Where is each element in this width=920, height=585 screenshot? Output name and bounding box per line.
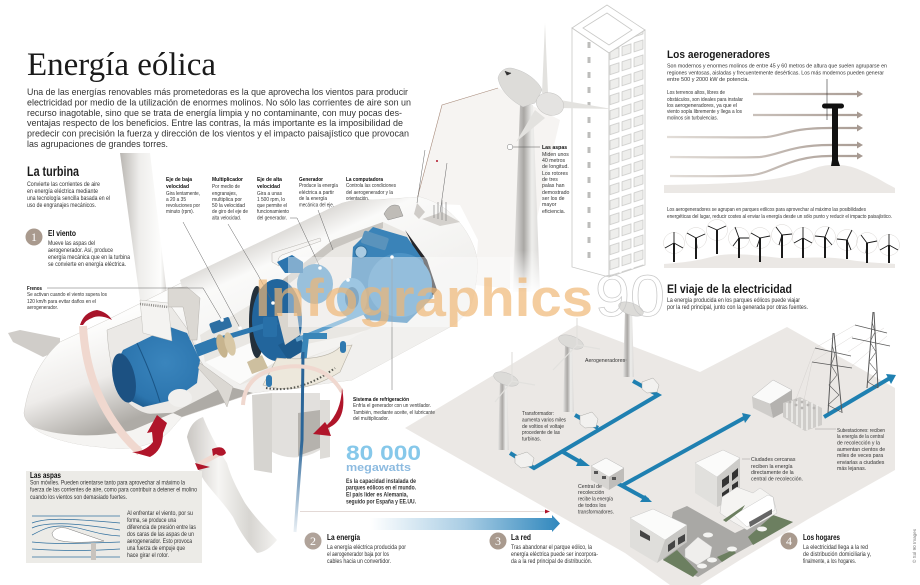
central label: transformadores. <box>578 510 614 516</box>
watermark: Infographics90: 90 <box>595 264 665 329</box>
turbine blades <box>516 23 612 142</box>
hub bracket <box>168 287 233 407</box>
anemometer and vent details <box>384 160 460 226</box>
label: eje de alta velocidad: velocidad <box>257 184 280 190</box>
roof slot <box>272 238 321 266</box>
intro paragraph: ventajas respecto de los beneficios. Entre las contras, la más importante es la imposibilidad de <box>27 118 403 128</box>
intro paragraph <box>27 87 411 149</box>
central label: de todos los <box>578 503 606 509</box>
wires <box>795 325 887 405</box>
copyright note: © Sol 90 Images <box>911 528 917 563</box>
step 1: el viento: se convierte en energía eléctrica. <box>48 261 126 268</box>
step 4: los hogares: finalmente, a los hogares. <box>803 558 856 565</box>
arrow heads <box>576 458 590 466</box>
nacelle opening <box>200 222 437 385</box>
panel: las aspas: cuando los vientos son demasiado fuertes. <box>30 494 127 501</box>
spinner lip <box>33 413 182 449</box>
turbine description: uso de engranajes mecánicos. <box>27 202 96 209</box>
aerogeneradores description <box>667 64 887 83</box>
label: sistema de refrigeración: También, mediante aceite, el lubricante <box>353 410 435 416</box>
label: sistema de refrigeración: Enfría el generador con un ventilador. <box>353 403 431 409</box>
arrow: big blue energy <box>370 515 560 532</box>
label: eje de alta velocidad: que permite el <box>257 203 287 209</box>
label: sistema de refrigeración: del multiplicador. <box>353 416 389 422</box>
wind profile note: Los terrenos altos, libres de <box>667 90 725 96</box>
label: generador <box>299 177 338 208</box>
label: freno: aerogenerador. <box>27 305 58 311</box>
label: la computadora: del aerogenerador y la <box>346 190 393 196</box>
farm labels <box>522 358 627 442</box>
panel: las aspas: aerogenerador. Esto provoca <box>127 538 193 545</box>
label: las aspas (scale): Las aspas <box>542 145 567 151</box>
label: freno: 120 km/h para evitar daños en el <box>27 299 96 305</box>
step 4: los hogares: de distribución domiciliaria y, <box>803 551 871 558</box>
substation label: de recolección y la <box>837 440 880 446</box>
step 3: la red: da a la red principal de distribución. <box>511 558 592 565</box>
step 1: el viento <box>26 228 131 268</box>
label: la computadora <box>346 177 396 202</box>
blue cable <box>295 352 303 532</box>
pylon 2 <box>852 312 890 388</box>
step 3: la red: Tras abandonar el parque eólico, la <box>511 544 593 551</box>
label: multiplicador: Multiplicador <box>212 177 243 183</box>
step 2: la energía: La energía eléctrica producida por <box>327 544 406 551</box>
substation label: Subestaciones: reciben <box>837 428 885 434</box>
intro paragraph: electricidad por medio de la utilización de enormes molinos. No sólo las corrientes de aire son un <box>27 98 411 108</box>
central de recolección <box>591 458 624 490</box>
pylon 1 <box>812 333 852 413</box>
step 4: los hogares: 4 <box>786 534 792 548</box>
wind profile note: obstáculos, son ideales para instalar <box>667 97 743 103</box>
label: eje de baja velocidad: a 20 a 35 <box>166 197 186 203</box>
panel: las aspas <box>26 471 202 563</box>
small house <box>685 537 712 565</box>
substation and capacitor array <box>752 380 822 431</box>
panel: las aspas: Son móviles. Pueden orientarse tanto para aprovechar al máximo la <box>30 480 186 486</box>
label: las aspas (scale): Los rotores <box>542 171 568 177</box>
yaw arrow <box>313 388 343 436</box>
farm labels: de voltios el voltaje <box>522 424 564 430</box>
label: las aspas (scale): de longitud. <box>542 164 569 170</box>
city label: directamente de la <box>751 470 794 476</box>
turbine hub <box>533 89 567 119</box>
multiplier (blue gearbox) <box>249 255 305 361</box>
label: generador: mecánica del eje. <box>299 202 334 208</box>
label: eje de alta velocidad: Eje de alta <box>257 177 282 183</box>
label: eje de baja velocidad: revoluciones por <box>166 203 200 209</box>
heading: los aerogeneradores: Los aerogeneradores <box>667 49 770 61</box>
wind park row of turbines <box>664 220 900 268</box>
wind profile note: molinos sin turbulencias. <box>667 116 718 122</box>
hill <box>664 165 895 193</box>
viaje description <box>667 297 808 311</box>
label: eje de alta velocidad: del generador. <box>257 216 287 222</box>
wind parks note <box>667 207 892 220</box>
label: la computadora: Controla las condiciones <box>346 183 396 189</box>
lower left building <box>630 509 687 563</box>
label: las aspas (scale): palas han <box>542 183 565 189</box>
stat: 80 000 megawatts: El país líder es Alemania, <box>346 492 408 498</box>
intro paragraph: predecir con precisión la fuerza y dirección de los vientos y el impacto paisajístico que provocan <box>27 128 409 138</box>
stat: 80 000 megawatts: parques eólicos en el mundo. <box>346 484 416 492</box>
label: freno <box>27 286 107 311</box>
intro paragraph: las agrupaciones de grandes torres. <box>27 139 168 149</box>
lower blade <box>187 417 277 553</box>
label: eje de alta velocidad: 1 500 rpm, lo <box>257 197 285 203</box>
city label: Ciudades cercanas <box>751 457 796 463</box>
city base <box>663 506 793 577</box>
projection: pale zoom area behind nacelle <box>416 88 560 290</box>
city label <box>742 457 803 482</box>
turbine description <box>27 181 110 209</box>
label: las aspas (scale): ser los de <box>542 196 565 202</box>
farm labels: turbinas. <box>522 436 541 442</box>
label: las aspas (scale): Miden unos <box>542 152 569 158</box>
panel: las aspas: hace girar el rotor. <box>127 552 169 559</box>
step 1: el viento: energía mecánica que en la turbina <box>48 254 131 261</box>
leader lines <box>47 150 447 390</box>
panel: las aspas: forma, se produce una <box>127 517 176 524</box>
label: multiplicador: 50 la velocidad <box>212 203 245 209</box>
label: eje de baja velocidad: minuto (rpm). <box>166 209 194 215</box>
low speed shaft <box>196 317 277 359</box>
watermark: Infographics90: Infographics <box>255 269 593 328</box>
label: multiplicador: engranajes, <box>212 191 237 197</box>
label: la computadora: orientación. <box>346 196 369 202</box>
dark crescent <box>405 230 437 308</box>
label: freno: Se activan cuando el viento supera los <box>27 292 107 298</box>
label: las aspas (scale): mayor <box>542 202 557 208</box>
intro paragraph: recurso inagotable, sino que se trata de energía limpia y no contaminante, con muy pocas des- <box>27 108 402 118</box>
farm labels: aumenta varios miles <box>522 418 566 424</box>
step 2: la energía: 2 <box>310 534 316 548</box>
label: las aspas (scale): demostrado <box>542 190 570 196</box>
label: las aspas (scale) <box>507 144 570 215</box>
step 3: la red <box>490 532 598 565</box>
intro paragraph: Una de las energías renovables más prometedoras es la que aprovecha los vientos para producir <box>27 87 408 97</box>
label: multiplicador: alta velocidad. <box>212 216 241 222</box>
panel: las aspas: Al enfrentar el viento, por su <box>127 510 193 517</box>
central label <box>578 484 614 516</box>
step 4: los hogares: Los hogares <box>803 533 840 542</box>
substation label: la energía de la central <box>837 434 884 440</box>
tall building <box>695 450 740 507</box>
farm turbine 2 <box>553 318 600 412</box>
step 1: el viento: 1 <box>31 230 37 244</box>
airfoil diagram <box>32 516 120 560</box>
panel: las aspas: dos caras de las aspas de un <box>127 531 194 538</box>
city block <box>630 450 793 577</box>
stat: 80 000 megawatts: megawatts <box>346 462 411 474</box>
wind profile note: viento sopla libremente y llega a los <box>667 109 742 115</box>
step 2: la energía: cables hacia un convertidor. <box>327 558 391 565</box>
aerogeneradores description: Son modernos y enormes molinos de entre 45 y 60 metros de altura que suelen agruparse en <box>667 64 887 70</box>
step 1: el viento: aerogenerador. Así, produce <box>48 247 114 254</box>
transformers <box>515 378 659 468</box>
generator (blue) <box>297 227 433 323</box>
label: eje de baja velocidad: Gira lentamente, <box>166 191 200 197</box>
background building outline <box>572 5 645 277</box>
wind profile diagram <box>664 79 895 193</box>
label: generador: Produce la energía <box>299 183 338 189</box>
substation label: más lejanas. <box>837 466 866 472</box>
label: sistema de refrigeración: Sistema de refrigeración <box>353 397 409 403</box>
label: eje de baja velocidad: velocidad <box>166 184 189 190</box>
label: las aspas (scale): 40 metros <box>542 158 565 164</box>
label: eje de baja velocidad <box>166 177 200 215</box>
green patches <box>663 550 698 577</box>
blade: top <box>120 153 168 303</box>
stat: 80 000 megawatts: Es la capacidad instalada de <box>346 478 417 485</box>
label: la computadora: La computadora <box>346 177 383 183</box>
label: generador: de la energía <box>299 196 327 202</box>
central label: recolección <box>578 490 604 496</box>
stat: 80 000 megawatts <box>346 442 421 506</box>
title: Energía eólica <box>27 47 216 83</box>
middle building <box>720 487 777 530</box>
step 3: la red: 3 <box>495 534 501 548</box>
stat: 80 000 megawatts: 80 000 <box>346 442 421 465</box>
step 4: los hogares: La electricidad llega a la red <box>803 544 868 551</box>
small turbine showing scale <box>498 23 612 294</box>
spinner opening <box>107 305 218 414</box>
label: las aspas (scale): eficiencia. <box>542 209 565 215</box>
label: eje de baja velocidad: Eje de baja <box>166 177 192 183</box>
label: eje de alta velocidad: funcionamiento <box>257 209 289 215</box>
pitch arrow <box>195 447 226 470</box>
turbine description: Convierte las corrientes de aire <box>27 181 101 188</box>
substation label <box>815 428 885 472</box>
step 3: la red: energía eléctrica puede ser incorpora- <box>511 551 598 558</box>
wind profile note: los aerogeneradores, ya que el <box>667 103 737 109</box>
substation label: enviarlas a ciudades <box>837 460 885 466</box>
blue power lines <box>510 374 896 502</box>
label: multiplicador: de giro del eje de <box>212 209 248 215</box>
central label: Central de <box>578 484 602 490</box>
rotor arrow <box>132 415 167 457</box>
turbine nacelle <box>498 68 542 107</box>
stat: 80 000 megawatts: seguido por España y EE.UU. <box>346 498 416 506</box>
step 2: la energía: el aerogenerador baja por los <box>327 551 389 558</box>
heading: la turbina: La turbina <box>27 163 79 179</box>
step 2: la energía: La energía <box>327 533 360 542</box>
turbine description: una tecnología sencilla basada en el <box>27 195 110 202</box>
label: eje de alta velocidad: Gira a unas <box>257 191 282 197</box>
label: generador: eléctrica a partir <box>299 190 334 196</box>
wind profile note <box>667 90 743 122</box>
ground plane: isometric wind farm <box>405 325 895 585</box>
label: las aspas (scale): de tres <box>542 177 558 183</box>
main hub (blue) <box>108 327 200 407</box>
city label: central de recolección. <box>751 476 803 482</box>
city label: reciben la energía <box>751 464 793 470</box>
panel: las aspas: Las aspas <box>30 471 61 480</box>
farm turbine 1 <box>492 352 535 450</box>
high speed shaft and pipe <box>296 310 370 365</box>
wind parks note: Los aerogeneradores se agrupan en parques eólicos para aprovechar al máximo las posibilidades <box>667 207 866 213</box>
label: sistema de refrigeración <box>353 397 435 422</box>
nacelle and spinner shell <box>24 197 478 449</box>
farm labels: procedente de las <box>522 430 560 436</box>
electricity pylons <box>795 312 890 413</box>
aerogeneradores description: regiones ventosas, aisladas y frecuentemente desérticas. Los más modernos pueden generar <box>667 70 884 76</box>
step 1: el viento: Mueve las aspas del <box>48 240 95 247</box>
label: multiplicador: multiplica por <box>212 197 242 203</box>
red rotation arrows <box>80 310 343 470</box>
panel: las aspas: fuerza de las corrientes de aire, como para contribuir a detener el molino <box>30 486 198 494</box>
panel: las aspas: diferencia de presión entre las <box>127 524 196 531</box>
step 1: el viento: El viento <box>48 229 76 238</box>
pale rotation bands <box>83 326 342 465</box>
substation label: miles de veces para <box>837 453 883 459</box>
turbine description: en energía eléctrica mediante <box>27 188 99 195</box>
farm turbine 3 <box>617 299 645 377</box>
panel: las aspas: una fuerza de empuje que <box>127 545 185 552</box>
farm labels: Transformador: <box>522 411 554 417</box>
left-face windows <box>588 42 590 258</box>
farm labels: Aerogeneradores <box>585 358 625 364</box>
arrow: thin red to the grid <box>300 510 550 514</box>
viaje description: por la red principal, junto con la generada por otras fuentes. <box>667 304 808 311</box>
heading: el viaje de la electricidad: El viaje de la electricidad <box>667 284 792 296</box>
floor beam <box>205 338 302 384</box>
viaje description: La energía producida en los parques eólicos puede viajar <box>667 297 800 304</box>
parked cars <box>697 526 767 568</box>
label: multiplicador <box>212 177 248 222</box>
wind arrows <box>667 94 858 176</box>
label: generador: Generador <box>299 177 323 183</box>
central label: recibe la energía <box>578 496 613 502</box>
outer shell <box>24 197 478 449</box>
yaw ring and tower section <box>252 341 352 473</box>
label: multiplicador: Por medio de <box>212 184 240 190</box>
blade root collar <box>140 300 172 341</box>
upper shell shading <box>253 222 383 308</box>
blade: left stub <box>8 330 60 357</box>
substation label: aumentan cientos de <box>837 447 885 453</box>
black turbine <box>822 79 844 166</box>
step 3: la red: La red <box>511 533 531 542</box>
wind parks note: energéticas del lugar, reducir costes al enviar la energía desde un sólo punto y reducir el impacto paisajístico. <box>667 214 892 220</box>
step 4: los hogares <box>780 532 871 565</box>
wind farm turbines <box>492 299 659 468</box>
label: freno: Frenos <box>27 286 42 292</box>
turbine tower <box>513 105 540 292</box>
label: eje de alta velocidad <box>257 177 289 222</box>
aerogeneradores description: entre 500 y 2000 kW de potencia. <box>667 77 749 83</box>
watermark band <box>288 257 513 327</box>
step 2: la energía <box>304 532 406 565</box>
